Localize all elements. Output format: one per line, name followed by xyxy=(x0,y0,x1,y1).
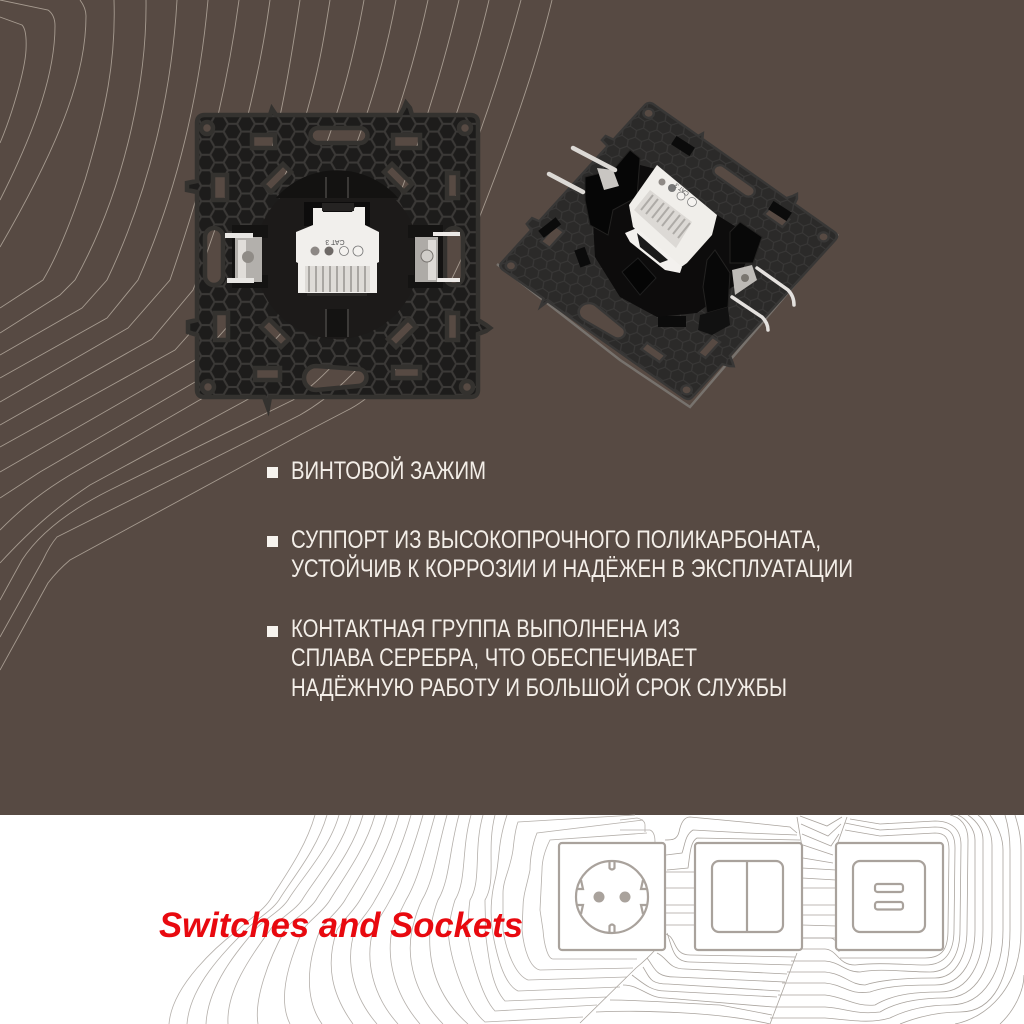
mounting plate with honeycomb xyxy=(187,103,490,408)
feature list xyxy=(267,455,853,702)
title: Switches and Sockets: Switches and Sockets xyxy=(159,906,523,945)
feature: screw clamp: ВИНТОВОЙ ЗАЖИМ xyxy=(291,455,486,485)
white RJ module angled: CAT 3 xyxy=(674,181,691,196)
white RJ module xyxy=(296,203,379,296)
feature: polycarbonate support: УСТОЙЧИВ К КОРРОЗИИ И НАДЁЖЕН В ЭКСПЛУАТАЦИИ xyxy=(291,553,853,583)
icon: power socket xyxy=(559,843,665,950)
black slots on plate xyxy=(538,136,792,327)
contour lines: upper background xyxy=(0,0,552,670)
left screw terminal xyxy=(225,225,268,288)
white RJ module angled xyxy=(625,165,717,273)
icon: double switch xyxy=(695,843,802,950)
feature: silver alloy contacts: СПЛАВА СЕРЕБРА, ЧТО ОБЕСПЕЧИВАЕТ xyxy=(291,644,697,672)
central housing xyxy=(255,170,419,339)
contour lines: footer left xyxy=(169,815,655,1024)
angled mounting plate xyxy=(486,89,854,413)
icon: USB outlet xyxy=(836,843,943,950)
upper left contacts xyxy=(549,148,619,192)
central housing and posts xyxy=(585,150,762,335)
feature: silver alloy contacts: НАДЁЖНУЮ РАБОТУ И БОЛЬШОЙ СРОК СЛУЖБЫ xyxy=(291,672,787,702)
lower right contacts xyxy=(732,265,794,330)
panel: white footer xyxy=(0,815,1024,1024)
panel: brown background xyxy=(0,0,1024,815)
feature: silver alloy contacts: КОНТАКТНАЯ ГРУППА ВЫПОЛНЕНА ИЗ xyxy=(291,615,680,643)
feature: screw clamp xyxy=(267,455,486,485)
feature: polycarbonate support xyxy=(267,526,853,583)
right screw terminal xyxy=(408,225,460,288)
contour lines: footer centre and right xyxy=(580,815,1024,1024)
product: socket angled view xyxy=(486,89,854,413)
feature: polycarbonate support: СУППОРТ ИЗ ВЫСОКОПРОЧНОГО ПОЛИКАРБОНАТА, xyxy=(291,526,821,554)
white RJ module: CAT 3 xyxy=(325,238,345,245)
feature: silver alloy contacts xyxy=(267,615,787,702)
plate edge thickness xyxy=(497,234,838,407)
product: socket front view xyxy=(187,103,490,408)
